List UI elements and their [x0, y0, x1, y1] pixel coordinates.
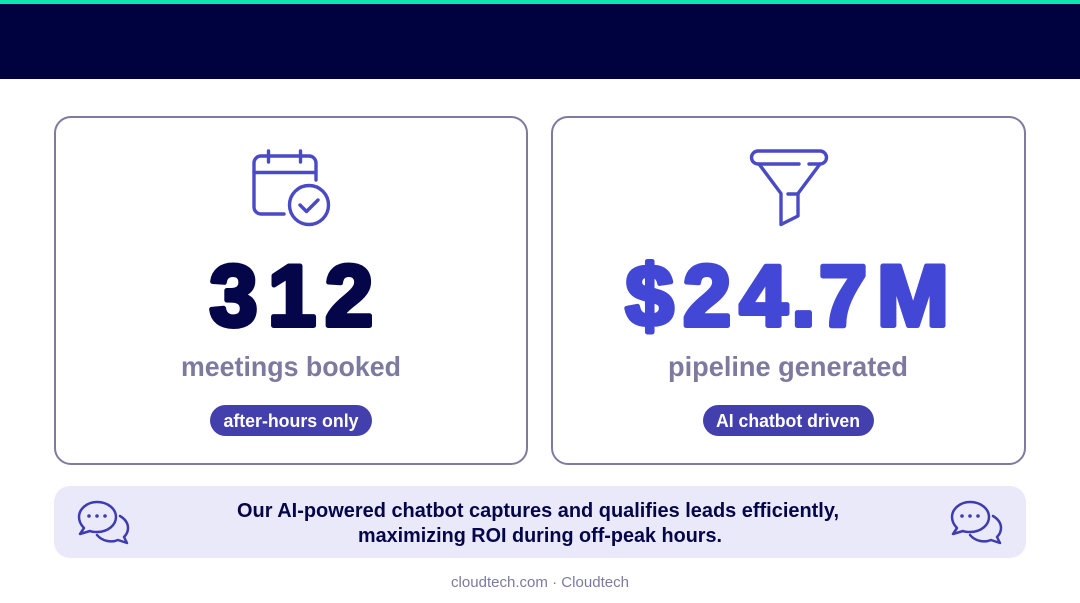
- panel: pipeline generated: [552, 117, 1025, 464]
- badge: after-hours only: [210, 405, 372, 436]
- icon: chat bubbles left: [79, 502, 128, 543]
- icon: funnel: [752, 151, 827, 224]
- header band: [0, 0, 1080, 79]
- icon: chat bubbles right: [952, 502, 1001, 543]
- callout text: Our AI-powered chatbot captures and qualifies leads efficiently,: [237, 500, 839, 522]
- callout text: [237, 500, 839, 547]
- panel: meetings booked: [55, 117, 527, 464]
- label: pipeline generated: pipeline generated: [668, 351, 908, 382]
- stat: $24.7M: $24.7M: [626, 248, 949, 344]
- callout text: maximizing ROI during off-peak hours.: [358, 525, 722, 547]
- label: meetings booked: meetings booked: [181, 351, 401, 382]
- top accent bar: [0, 0, 1080, 4]
- badge: AI chatbot driven: [703, 405, 874, 436]
- stat: 312: 312: [210, 248, 373, 344]
- callout banner: [54, 486, 1026, 558]
- badge: AI chatbot driven: AI chatbot driven: [716, 410, 860, 431]
- footer source: cloudtech.com · Cloudtech: [451, 575, 629, 591]
- badge: after-hours only: after-hours only: [224, 410, 359, 431]
- icon: calendar with check: [254, 151, 328, 224]
